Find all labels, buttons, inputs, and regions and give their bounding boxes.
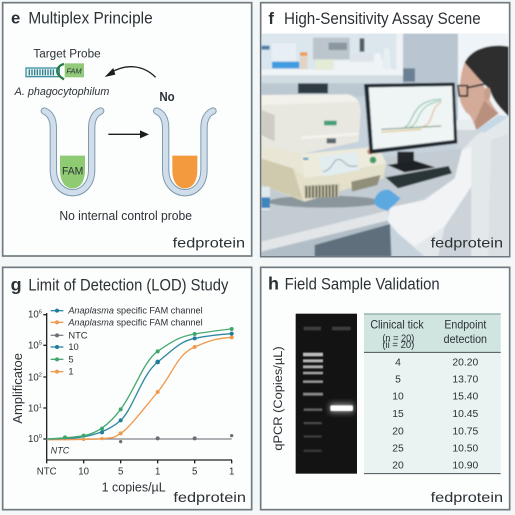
icon: target probe: FAM [66, 66, 83, 75]
panel g title: g [11, 274, 22, 294]
panel e title: e [11, 9, 20, 28]
panel f title: f [268, 9, 274, 28]
table header: detection [444, 333, 487, 346]
line chart [10, 306, 234, 494]
y tick labels: 2 [39, 372, 42, 378]
y axis title: Amplificatoe [10, 353, 25, 424]
watermark: fedprotein [173, 489, 246, 505]
table rows: 5 [395, 374, 401, 385]
table rows: 10.90 [452, 461, 479, 472]
legend: 1 [68, 367, 74, 377]
table rows: 10 [392, 391, 404, 402]
shelf [261, 33, 415, 97]
monitor [364, 83, 457, 172]
NTC annotation: NTC [51, 445, 70, 455]
lab photo illustration [261, 33, 509, 257]
keyboard [385, 166, 452, 188]
table rows: 20.20 [452, 357, 479, 368]
table header: Endpoint [444, 319, 487, 332]
x tick labels: 1 [155, 467, 160, 478]
species label: A. phagocytophilum [14, 86, 109, 98]
panel: multiplex principle [3, 3, 252, 256]
arrow: between tubes [108, 130, 149, 138]
watermark: fedprotein [431, 235, 503, 251]
x tick labels [37, 467, 234, 478]
PCR machine [261, 94, 386, 202]
x tick labels: NTC [37, 467, 57, 478]
y tick labels: 5 [39, 341, 42, 347]
caption: No internal control probe [59, 209, 192, 223]
table rows: 4 [395, 357, 401, 368]
y tick labels: 10 [28, 309, 39, 320]
background wall [262, 82, 458, 256]
no label: No [159, 90, 175, 104]
table rows: 10.75 [452, 426, 479, 437]
y axis label: qPCR (Copies/µL) [271, 346, 285, 451]
x tick labels: 5 [118, 467, 123, 478]
arrow: curved to probe [105, 67, 156, 77]
table header [364, 314, 501, 474]
icon: target probe [26, 63, 84, 79]
panel h title: Field Sample Validation [285, 275, 440, 294]
orange series [47, 335, 234, 441]
panel g title: Limit of Detection (LOD) Study [28, 275, 229, 294]
data table [364, 314, 501, 474]
x tick labels: 10 [78, 467, 89, 478]
panel h title: h [268, 274, 279, 294]
table rows: 15 [392, 409, 404, 420]
table header: (ii = 20) [382, 340, 414, 351]
y tick labels: 1 [39, 403, 42, 409]
table rows: 13.70 [452, 374, 479, 385]
panel e title: Multiplex Principle [28, 9, 153, 28]
legend [51, 306, 203, 377]
table header: Clinical tick [370, 319, 424, 332]
tube on desk [261, 187, 270, 210]
panel: limit of detection [3, 267, 252, 510]
panel: assay scene [261, 3, 510, 257]
NTC series [47, 434, 233, 443]
y tick labels [28, 309, 42, 445]
table rows: 20 [392, 461, 404, 472]
scientist [374, 46, 509, 257]
table rows: 15.40 [452, 391, 479, 402]
panel: field sample validation [261, 267, 510, 510]
y tick labels: 10 [28, 403, 39, 414]
table rows: 10.45 [452, 409, 479, 420]
y tick labels: 10 [28, 434, 39, 445]
blue series [47, 332, 234, 439]
legend: 10 [68, 342, 79, 352]
legend: Anaplasma specific FAM channel [67, 317, 203, 327]
y tick labels: 0 [39, 434, 42, 440]
watermark: fedprotein [173, 235, 245, 251]
table rows [392, 357, 479, 472]
axes [43, 313, 232, 463]
x tick labels: 5 [192, 467, 197, 478]
y tick labels: 10 [28, 341, 39, 352]
tube: FAM [44, 111, 101, 193]
legend: Anaplasma specific FAM channel [67, 306, 203, 316]
target probe label: Target Probe [33, 46, 101, 60]
tube: FAM: FAM [62, 165, 83, 177]
x axis title: 1 copies/µL [102, 479, 166, 494]
table rows: 10.50 [452, 444, 479, 455]
green series [47, 327, 234, 439]
x tick labels: 1 [229, 467, 234, 478]
gel image [296, 314, 357, 474]
y tick labels: 10 [28, 372, 39, 383]
table rows: 20 [392, 426, 404, 437]
table header: (n = 20) [382, 333, 414, 344]
watermark: fedprotein [431, 489, 503, 505]
table rows: 25 [392, 444, 404, 455]
panel f title: High-Sensitivity Assay Scene [284, 9, 481, 28]
legend: 5 [68, 354, 74, 364]
y tick labels: 6 [39, 309, 42, 315]
desk [261, 148, 468, 257]
tube: orange [157, 111, 213, 193]
legend: NTC [68, 330, 88, 340]
